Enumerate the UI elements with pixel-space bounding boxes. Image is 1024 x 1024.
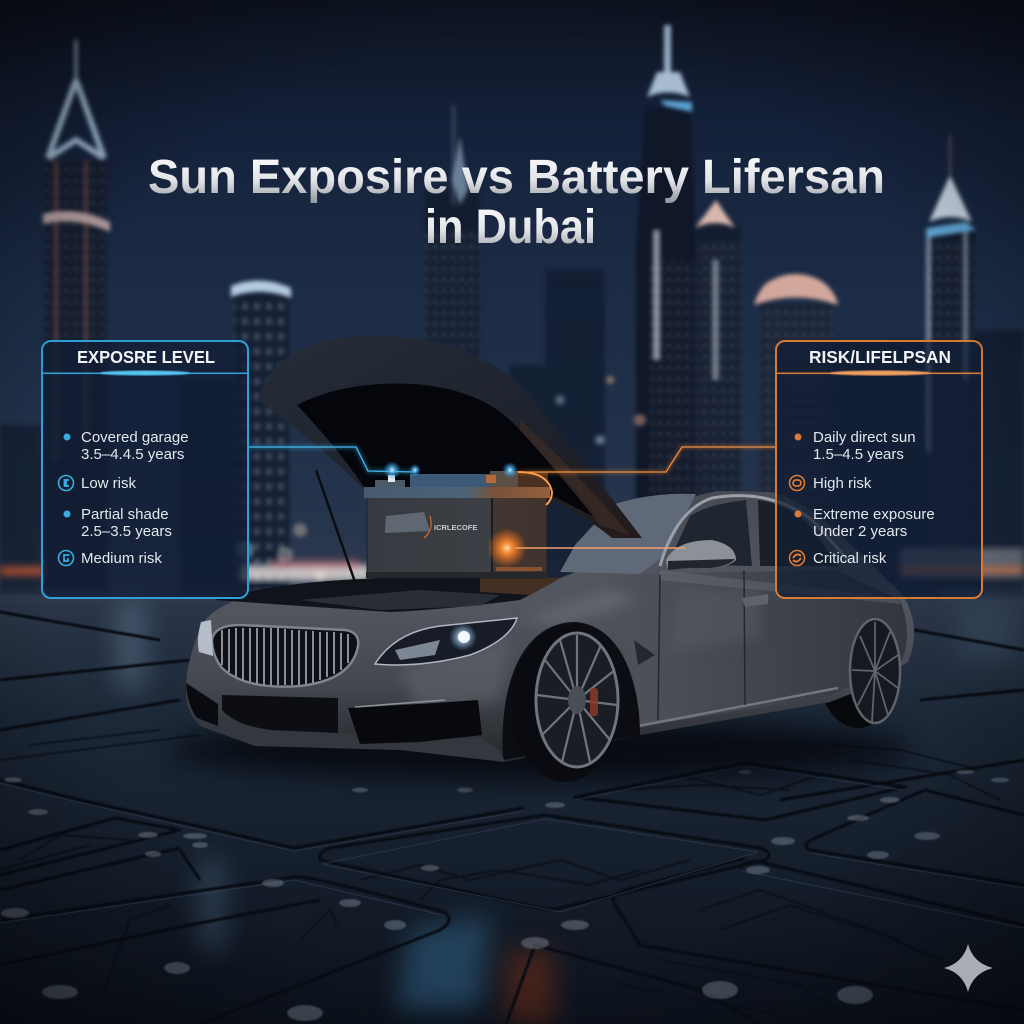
tall tower	[636, 25, 696, 590]
ground reflections	[118, 600, 1020, 1024]
label: ICRLECOFE	[434, 523, 477, 532]
far tower silhouettes	[0, 270, 1024, 600]
item: daily direct sun: 1.5–4.5 years	[813, 446, 904, 463]
hood strut	[316, 470, 355, 582]
Dubai skyline	[0, 25, 1024, 600]
rear wheel	[850, 619, 900, 723]
battery	[364, 471, 550, 578]
centre air intake	[222, 695, 338, 733]
highlight lines on panel edges	[0, 766, 1024, 928]
icon: sparkle watermark	[944, 944, 993, 992]
panel: exposure level	[42, 341, 248, 598]
headlight	[375, 618, 517, 665]
car shadow	[170, 720, 910, 780]
short tower	[231, 280, 291, 592]
wet circuit-board ground	[0, 585, 1024, 1024]
car	[186, 491, 914, 782]
engine bay	[215, 578, 560, 612]
bokeh lights	[236, 376, 646, 581]
windshield	[560, 494, 696, 574]
title: in Dubai	[425, 201, 596, 254]
left tower	[43, 40, 110, 590]
panel: risk and lifespan	[776, 341, 982, 598]
open hood	[258, 335, 642, 582]
fender arch	[502, 622, 640, 760]
lid	[364, 487, 550, 498]
hood panel	[258, 335, 642, 538]
item: covered garage: 3.5–4.4.5 years	[81, 446, 184, 463]
left air vent	[186, 683, 218, 726]
side windows	[668, 500, 752, 566]
icon and label: critical risk: Critical risk	[813, 550, 887, 567]
right tower	[925, 135, 976, 590]
door highlights	[660, 570, 900, 604]
panel header line	[776, 370, 982, 376]
item: covered garage	[64, 429, 189, 463]
horizon city glow	[0, 548, 1024, 581]
icon and label: high risk: High risk	[813, 475, 872, 492]
icon and label: low risk: Low risk	[81, 475, 137, 492]
left headlight	[198, 620, 213, 656]
ground studs	[1, 770, 1009, 1021]
title	[148, 151, 885, 254]
background: night sky	[0, 0, 1024, 620]
base	[366, 572, 548, 578]
heading: exposure level: EXPOSRE LEVEL	[77, 347, 215, 367]
roof chrome line	[660, 496, 850, 566]
casing	[367, 496, 547, 578]
hood inner	[297, 384, 600, 520]
terminals	[375, 471, 548, 489]
front bumper	[187, 682, 505, 762]
item: covered garage: Covered garage	[81, 429, 189, 446]
fender vent	[634, 640, 655, 665]
circuit panel seams	[0, 612, 1024, 1024]
front wheel	[511, 628, 619, 782]
item: extreme exposure: Under 2 years	[813, 523, 907, 540]
item: extreme exposure	[794, 506, 935, 540]
right air intake	[348, 700, 482, 744]
item: partial shade	[64, 506, 172, 540]
label	[385, 512, 477, 538]
connector: blue line to left panel	[248, 447, 421, 479]
item: daily direct sun: Daily direct sun	[813, 429, 916, 446]
hot spot	[487, 528, 527, 568]
item: partial shade: Partial shade	[81, 506, 169, 523]
connector: orange line to right panel	[502, 447, 777, 548]
icon and label: medium risk: Medium risk	[81, 550, 162, 567]
circuit traces	[0, 730, 1000, 1024]
heading: risk and lifespan: RISK/LIFELPSAN	[809, 347, 951, 367]
mirror	[666, 540, 736, 570]
item: partial shade: 2.5–3.5 years	[81, 523, 172, 540]
body highlights	[400, 590, 760, 715]
panel header line	[42, 370, 248, 376]
centre tower	[425, 105, 480, 590]
title: Sun Exposire vs Battery Lifersan	[148, 151, 885, 204]
item: daily direct sun	[794, 429, 916, 463]
item: extreme exposure: Extreme exposure	[813, 506, 935, 523]
grille	[212, 625, 358, 687]
car body	[186, 491, 914, 762]
door side panel	[600, 570, 907, 728]
dome tower	[754, 274, 838, 590]
pointed tower	[695, 200, 741, 590]
rear tyre	[818, 612, 898, 728]
